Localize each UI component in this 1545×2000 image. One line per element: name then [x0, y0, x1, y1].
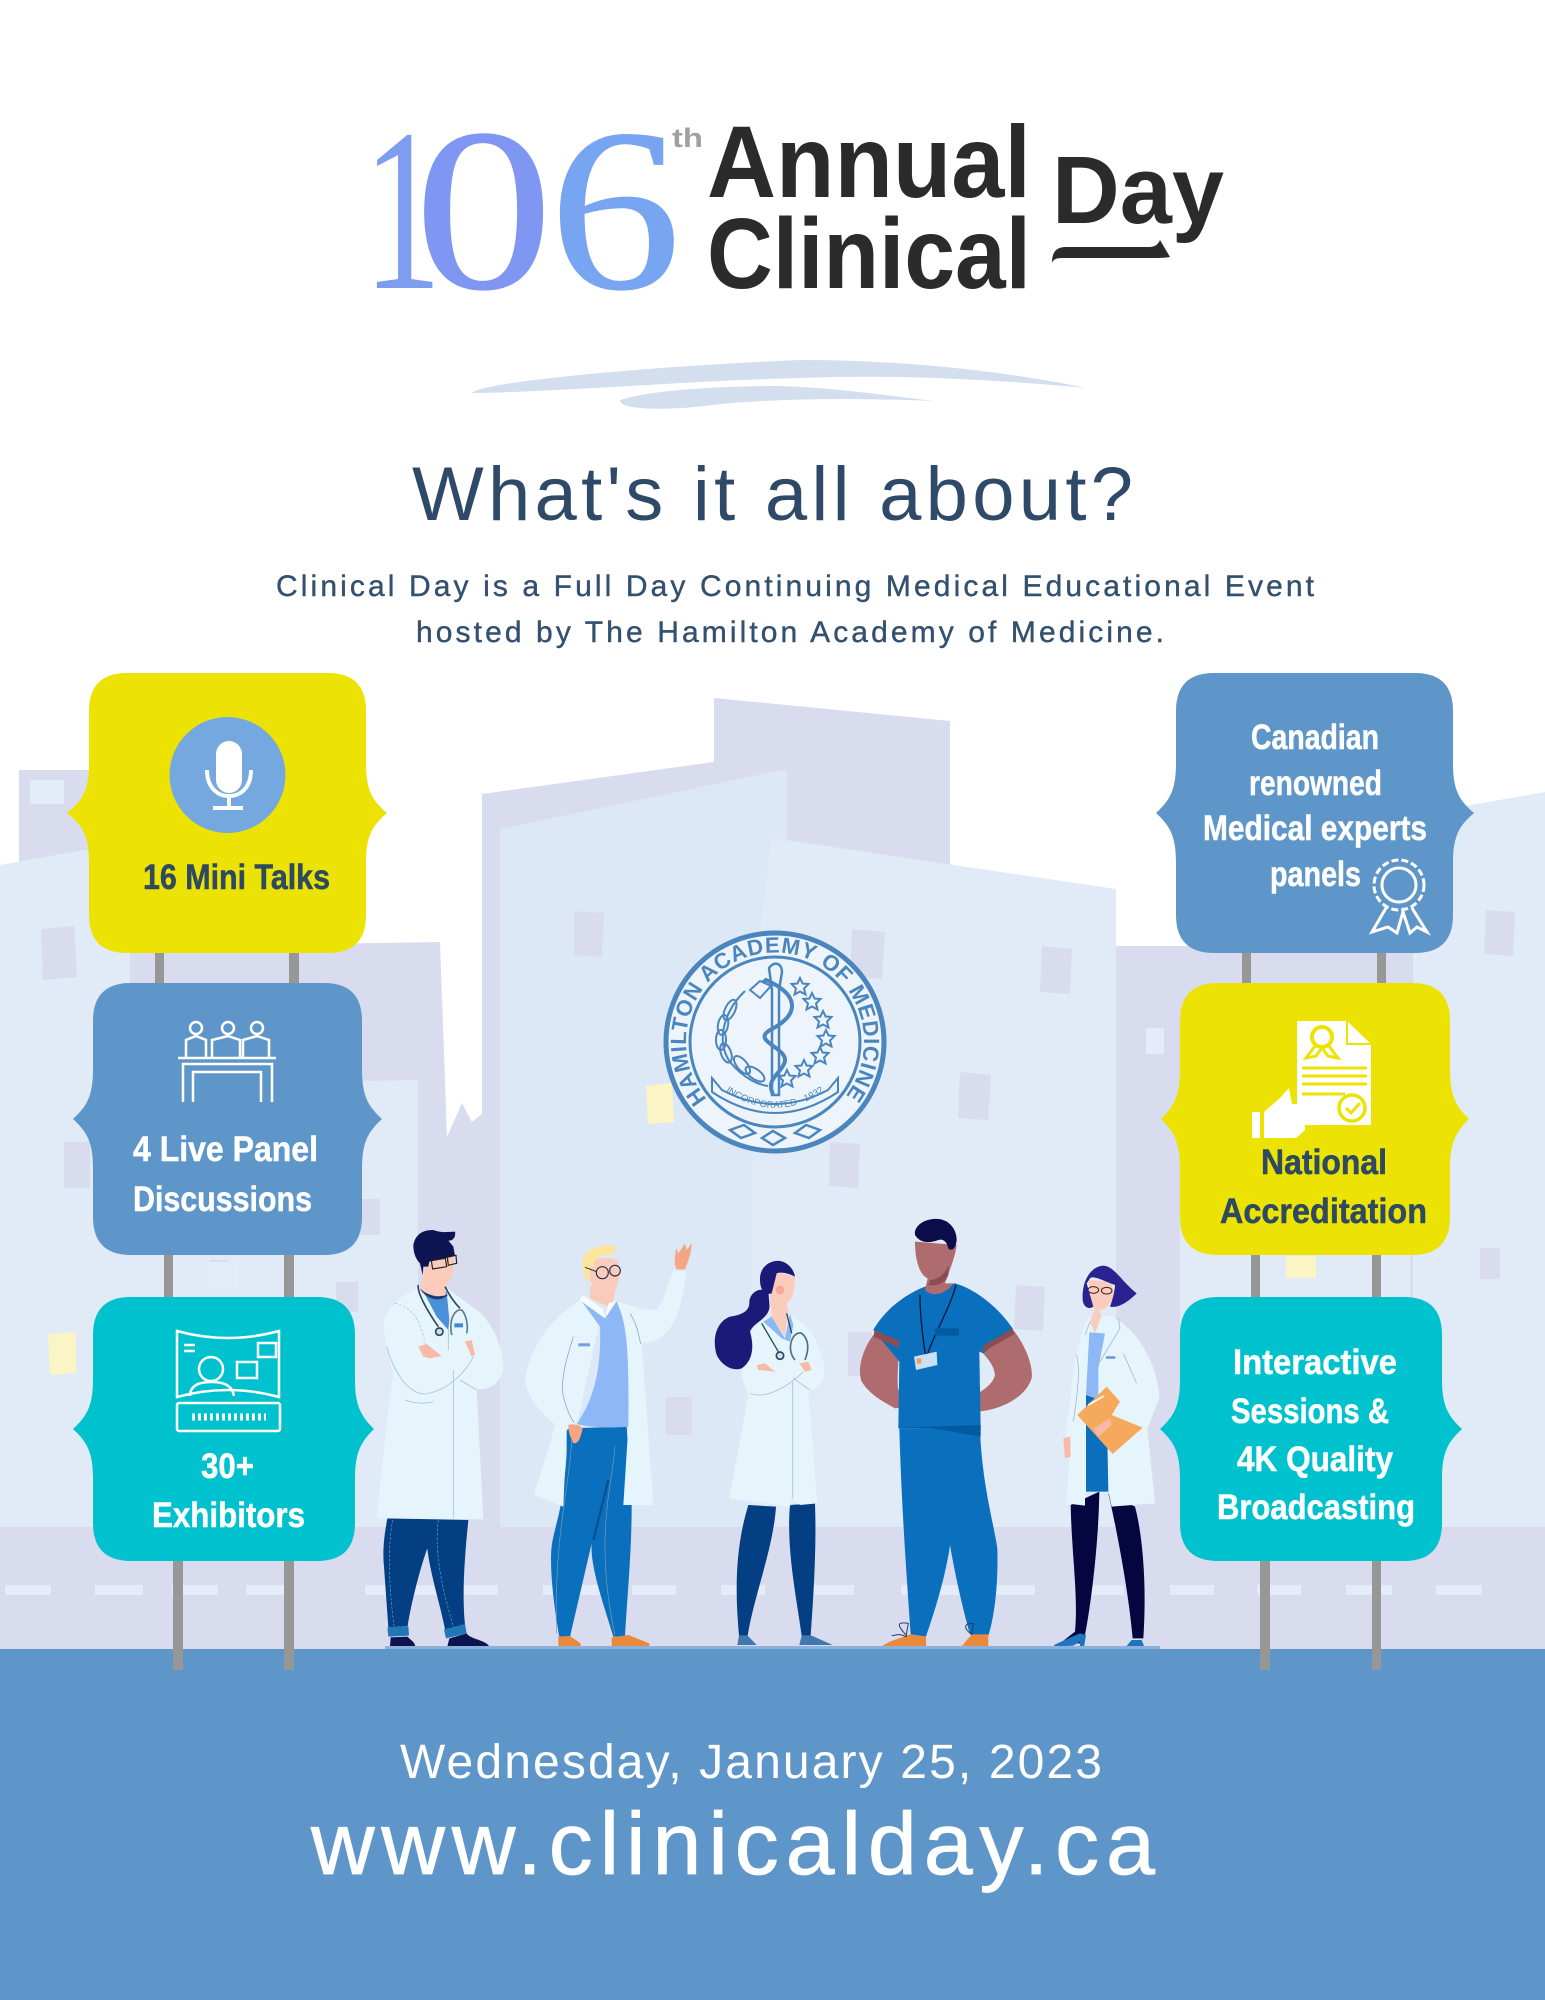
doctor 1: arms crossed with stethoscope [377, 1230, 503, 1647]
sign posts [155, 950, 1386, 1670]
nurse in blue scrubs [860, 1219, 1032, 1647]
panel: interactive sessions: Interactive [1233, 1343, 1397, 1382]
panel: exhibitors [73, 1297, 374, 1561]
academy seal: HAMILTON ACADEMY OF MEDICINE [670, 937, 880, 1107]
bottom band [0, 1649, 1545, 2000]
panel: live panel discussions: Discussions [133, 1180, 312, 1219]
panel: canadian experts [1156, 673, 1474, 953]
icon: microphone [170, 717, 286, 833]
logo: 106th Annual Clinical Day [363, 81, 1224, 339]
heading: What's it all about? [412, 452, 1133, 537]
icon: panel table [178, 1022, 276, 1102]
doctor 2: blond raising hand [525, 1243, 692, 1647]
intro text: hosted by The Hamilton Academy of Medicine. [416, 616, 1164, 649]
icon: certificate with thumb [1252, 1021, 1371, 1138]
panel: canadian experts: Medical experts [1203, 809, 1427, 848]
logo: 106th Annual Clinical Day: Clinical [707, 198, 1031, 310]
panel: national accreditation: National [1261, 1143, 1387, 1182]
logo: 106th Annual Clinical Day: 6 [549, 81, 681, 338]
panel: exhibitors: 30+ [201, 1447, 254, 1486]
logo: 106th Annual Clinical Day: Day [1052, 137, 1224, 244]
icon: ribbon [1372, 860, 1427, 933]
brush stroke divider [472, 360, 1086, 409]
panel: interactive sessions [1160, 1297, 1462, 1561]
panel: national accreditation: Accreditation [1220, 1192, 1427, 1231]
panel: canadian experts: renowned [1249, 764, 1382, 803]
logo: 106th Annual Clinical Day: th [672, 123, 703, 153]
academy seal: INCORPORATED - 1932 [726, 1086, 824, 1108]
event date: Wednesday, January 25, 2023 [400, 1736, 1102, 1789]
panel: canadian experts: panels [1270, 855, 1361, 894]
panel: interactive sessions: Sessions & [1231, 1392, 1389, 1431]
logo: 106th Annual Clinical Day: 0 [414, 82, 553, 339]
panel: canadian experts: Canadian [1251, 718, 1379, 757]
website: www.clinicalday.ca [310, 1794, 1155, 1893]
icon: exhibitor screen [177, 1331, 280, 1431]
panel: 16 mini talks: 16 Mini Talks [143, 858, 330, 897]
posts overlap band [173, 1649, 1381, 1670]
panel: live panel discussions: 4 Live Panel [133, 1130, 318, 1169]
doctor 3: ponytail with stethoscope [715, 1261, 833, 1645]
panel: national accreditation [1161, 983, 1469, 1255]
intro text: Clinical Day is a Full Day Continuing Medical Educational Event [276, 570, 1315, 603]
intro text [276, 570, 1315, 649]
doctor 5: with orange folder [1054, 1266, 1159, 1648]
panel: interactive sessions: Broadcasting [1217, 1488, 1415, 1527]
panel: exhibitors: Exhibitors [152, 1496, 305, 1535]
logo: 106th Annual Clinical Day: 1 [363, 81, 442, 338]
panel: 16 mini talks [67, 673, 387, 953]
logo: 106th Annual Clinical Day: Annual [707, 105, 1031, 219]
panel: live panel discussions [73, 983, 382, 1255]
city skyline background [0, 698, 1545, 1650]
panel: interactive sessions: 4K Quality [1237, 1440, 1393, 1479]
